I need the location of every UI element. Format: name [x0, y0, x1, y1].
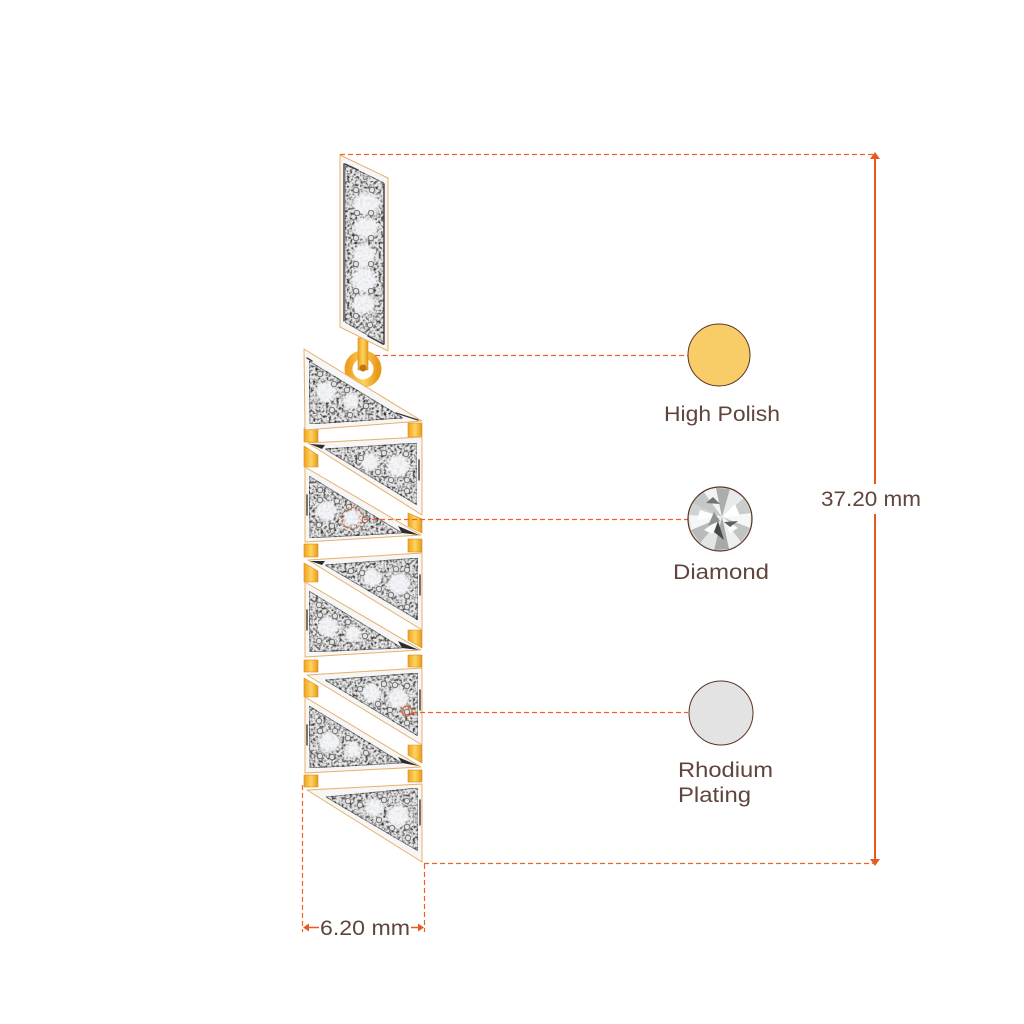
- triangle 8: [307, 784, 422, 862]
- width dimension guides: [302, 785, 424, 932]
- triangle 4: [308, 553, 422, 630]
- gold connector links: [304, 423, 422, 787]
- triangle 3: [305, 467, 421, 542]
- swatch: rhodium plating: [689, 681, 753, 745]
- marker: diamond callout: [342, 508, 362, 528]
- label: diamond: Diamond: [673, 561, 769, 584]
- label: rhodium plating: Plating: [678, 784, 751, 807]
- height arrow: [870, 152, 880, 866]
- width arrows: [303, 924, 424, 932]
- height label: 37.20 mm: [821, 488, 921, 511]
- label: rhodium plating: [678, 759, 773, 807]
- triangle 2: [308, 437, 422, 515]
- triangle 6: [307, 668, 422, 745]
- height dimension guides: [340, 154, 873, 864]
- swatch: high polish: [688, 324, 750, 386]
- earring: [304, 155, 422, 862]
- triangle 1: [304, 349, 422, 430]
- triangle 7: [305, 697, 421, 773]
- leader lines: [364, 356, 688, 712]
- marker: rhodium callout: [402, 706, 412, 716]
- top bar: [340, 155, 388, 351]
- swatch: diamond: [688, 487, 752, 551]
- triangle 5: [305, 582, 421, 657]
- bail ring: [348, 338, 378, 384]
- width label: 6.20 mm: [320, 917, 410, 940]
- label: high polish: High Polish: [664, 403, 780, 426]
- label: rhodium plating: Rhodium: [678, 759, 773, 782]
